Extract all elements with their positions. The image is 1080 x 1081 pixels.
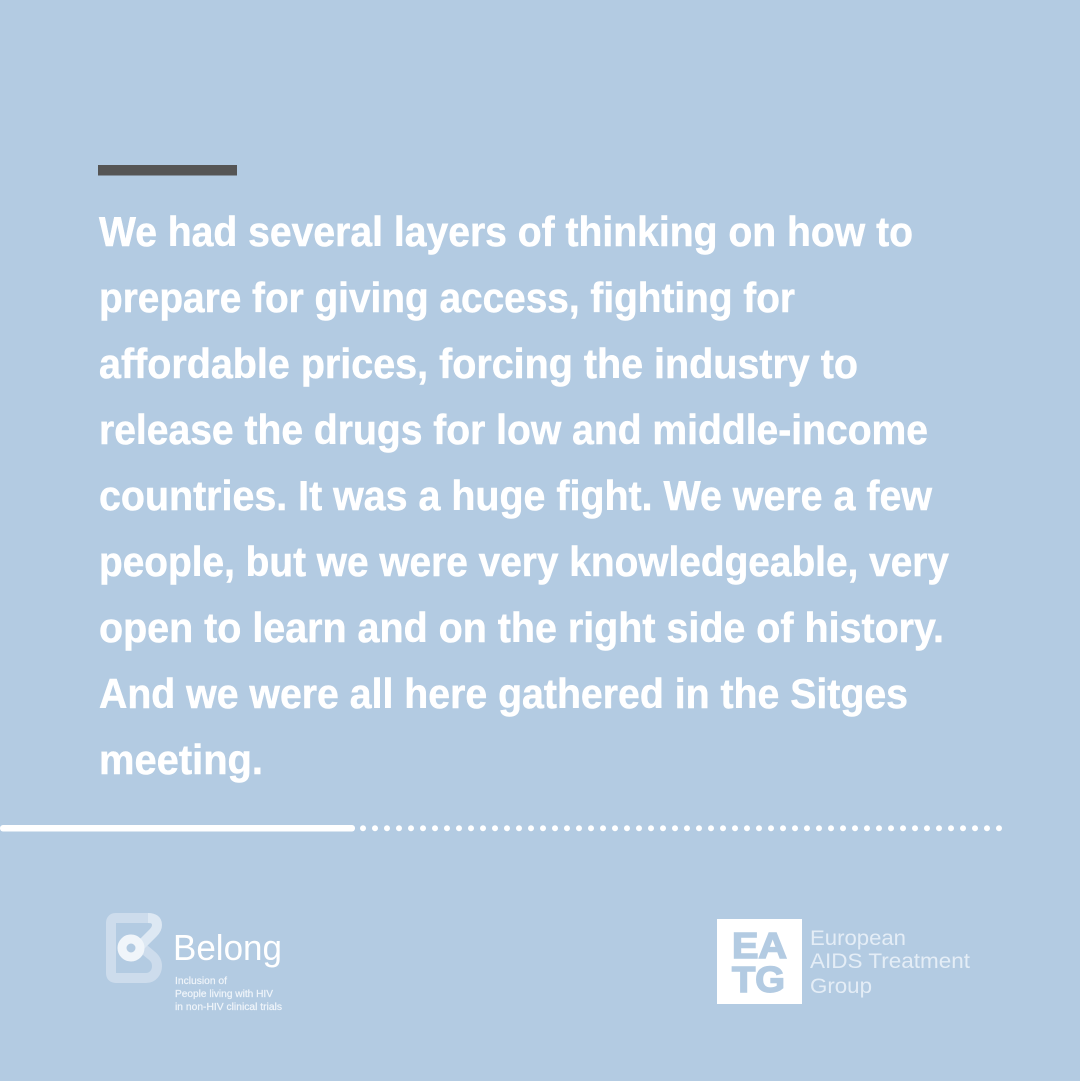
wordmark: Belong	[173, 927, 282, 968]
tagline	[175, 976, 282, 1013]
square letters: EA	[732, 925, 787, 966]
quote text	[99, 208, 950, 783]
tagline: People living with HIV	[175, 989, 273, 1000]
logo: EATG	[717, 919, 970, 1004]
quote text: release the drugs for low and middle-income	[99, 406, 928, 453]
square letters	[732, 925, 787, 1000]
organisation name	[810, 927, 970, 998]
quote text: open to learn and on the right side of history.	[99, 604, 944, 651]
quote text: people, but we were very knowledgeable, very	[99, 538, 950, 585]
quote text: affordable prices, forcing the industry to	[99, 340, 858, 387]
quote text: prepare for giving access, fighting for	[99, 274, 795, 321]
white square	[717, 919, 802, 1004]
quote text: And we were all here gathered in the Sitges	[99, 670, 908, 717]
logo: Belong	[111, 918, 282, 1013]
quote text: countries. It was a huge fight. We were a few	[99, 472, 932, 519]
organisation name: Group	[810, 975, 872, 998]
tagline: Inclusion of	[175, 976, 227, 987]
tagline: in non-HIV clinical trials	[175, 1002, 282, 1013]
square letters: TG	[732, 959, 785, 1000]
quote text: meeting.	[99, 736, 263, 783]
quote text: We had several layers of thinking on how to	[99, 208, 913, 255]
divider: solid and dotted line	[0, 825, 1000, 832]
icon: Belong mark	[111, 918, 157, 978]
organisation name: European	[810, 927, 906, 950]
organisation name: AIDS Treatment	[810, 950, 970, 973]
accent bar	[98, 165, 237, 176]
